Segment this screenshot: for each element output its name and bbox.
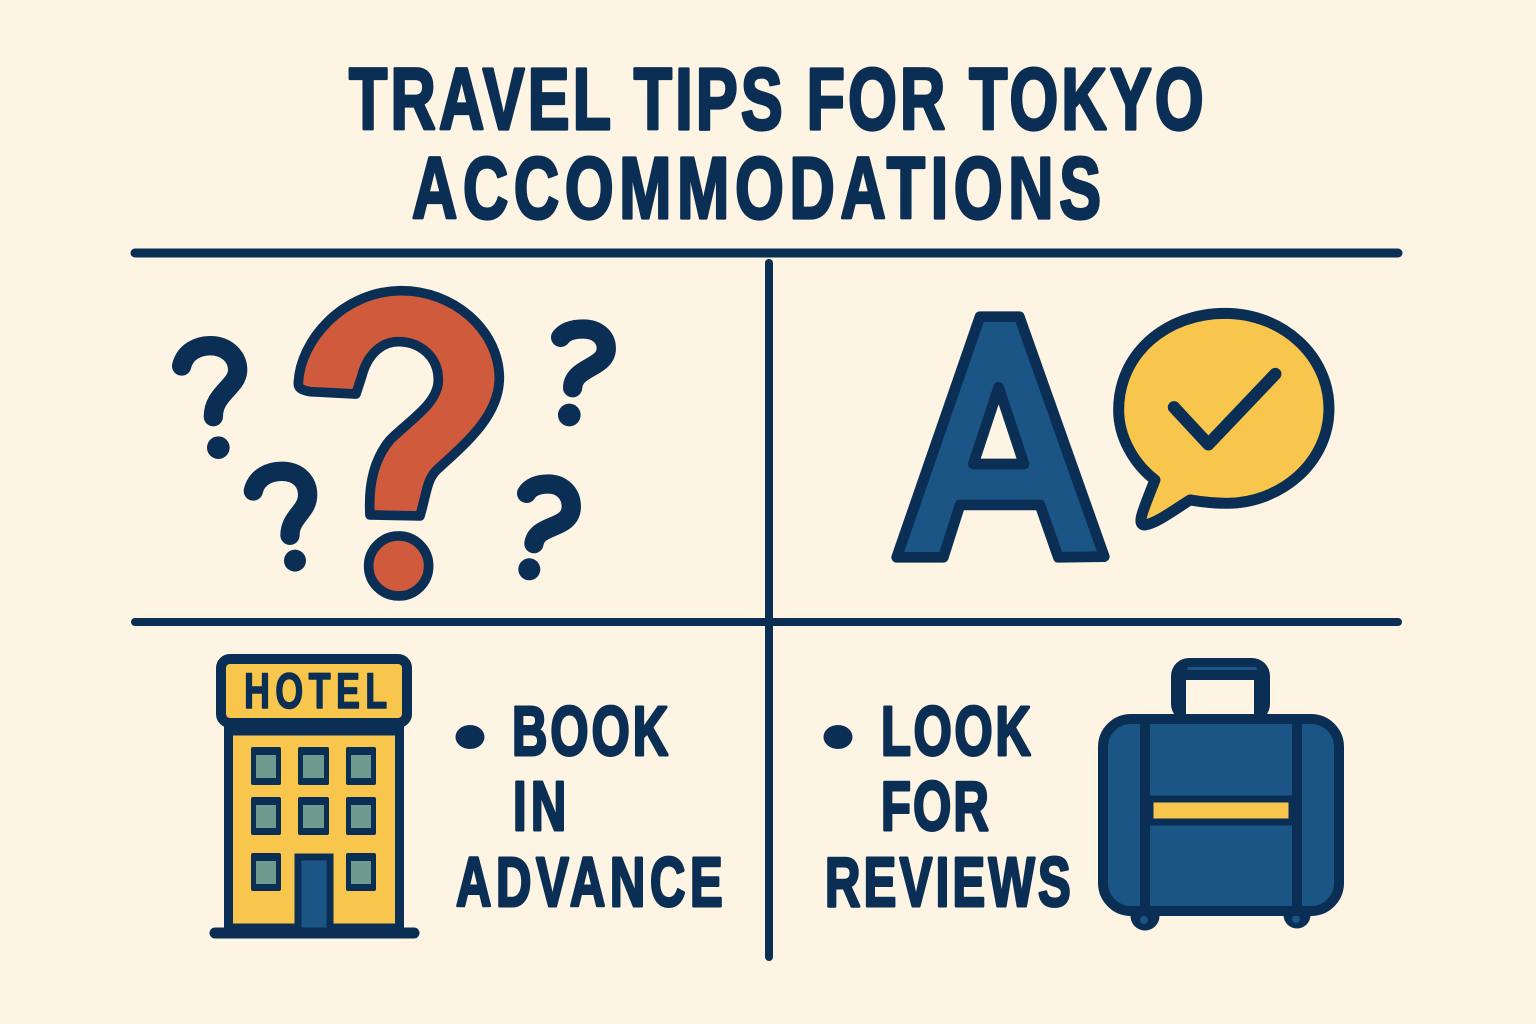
panel: look for reviews	[824, 658, 1339, 930]
title	[349, 51, 1204, 238]
icon: small question mark, upper left	[182, 346, 238, 459]
tip text: book in advance: IN	[513, 766, 566, 845]
icon: letter A	[897, 317, 1104, 557]
panel: top rated	[897, 313, 1329, 557]
tip text: book in advance: ADVANCE	[456, 842, 723, 921]
title line 2: ACCOMMODATIONS	[412, 140, 1101, 238]
hotel sign text: HOTEL	[244, 664, 387, 719]
icon: small question mark, lower right	[518, 484, 571, 580]
icon: suitcase	[1103, 658, 1339, 930]
bullet	[824, 725, 852, 749]
tip text: book in advance: BOOK	[512, 691, 668, 770]
tip text: look for reviews: LOOK	[881, 691, 1031, 770]
tip text: look for reviews: REVIEWS	[825, 842, 1071, 921]
panel: book in advance	[215, 659, 723, 933]
icon: small question mark, lower left	[253, 471, 308, 572]
title line 1: TRAVEL TIPS FOR TOKYO	[349, 51, 1204, 149]
panel: question marks	[182, 291, 606, 596]
tip text: look for reviews	[825, 691, 1071, 921]
icon: speech bubble with check mark	[1119, 313, 1329, 525]
icon: small question mark, upper right	[558, 329, 606, 426]
bullet	[456, 725, 484, 749]
tip text: book in advance	[456, 691, 723, 921]
tip text: look for reviews: FOR	[881, 766, 989, 845]
icon: large red question mark	[298, 291, 499, 596]
icon: hotel building	[215, 659, 414, 933]
